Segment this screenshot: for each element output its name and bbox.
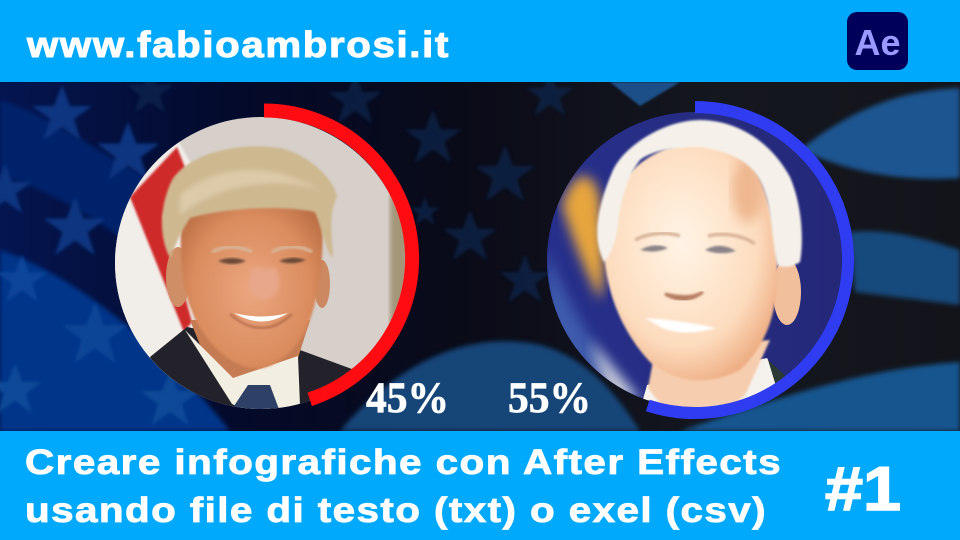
title line 2: usando file di testo (txt) o exel (csv) (25, 491, 767, 530)
neck (648, 340, 770, 410)
value label: 55%: 55% (508, 375, 591, 422)
mouth (234, 313, 288, 322)
shirt and jacket (643, 358, 776, 407)
episode number: #1 (825, 455, 901, 524)
bottom banner (0, 431, 960, 540)
icon: After Effects logo: Ae (854, 22, 901, 63)
progress ring: 55% blue (648, 107, 848, 413)
background: flag with stars (0, 68, 960, 431)
suit (150, 327, 352, 409)
hair (597, 120, 802, 267)
eyes (640, 245, 736, 253)
face (181, 194, 323, 369)
stars on the flag (0, 85, 200, 426)
blurred lower left background (547, 258, 638, 396)
portrait: right candidate (545, 110, 845, 410)
ears (166, 247, 188, 307)
neck (190, 320, 310, 378)
nose (665, 292, 703, 300)
brows (212, 247, 312, 252)
right ear (773, 259, 801, 325)
progress ring: 45% red (264, 110, 412, 399)
icon: After Effects logo (847, 12, 908, 70)
top banner (0, 0, 960, 82)
value label: 45%: 45% (366, 375, 449, 422)
orange blur (562, 176, 603, 300)
brows (635, 233, 755, 244)
tie (234, 385, 278, 409)
flag behind (115, 142, 194, 391)
nose (249, 268, 279, 300)
forehead tan (732, 158, 764, 222)
portrait: left candidate (110, 115, 410, 420)
eyes (218, 258, 306, 264)
website heading: www.fabioambrosi.it (26, 24, 450, 65)
hair (162, 146, 337, 258)
face (604, 142, 778, 380)
shirt (185, 330, 300, 412)
mouth (645, 318, 716, 332)
title line 1: Creare infografiche con After Effects (25, 443, 782, 482)
